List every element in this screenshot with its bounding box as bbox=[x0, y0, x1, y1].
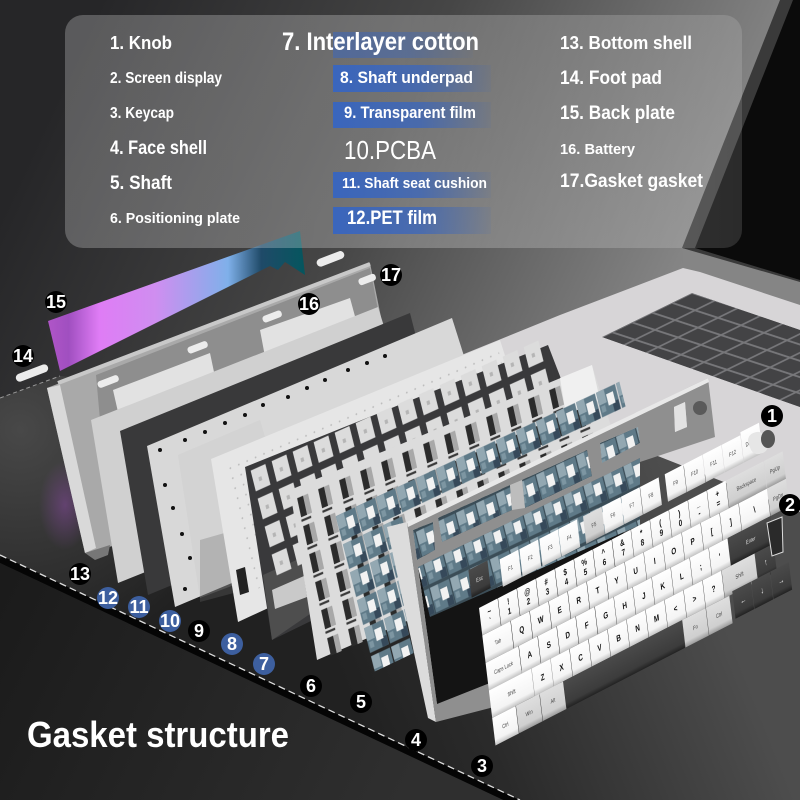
QWERTY row: PgDn bbox=[773, 492, 784, 504]
number markers: 14 bbox=[13, 346, 33, 366]
ZXCV row: Shift bbox=[735, 570, 744, 581]
ASDF row: K bbox=[660, 580, 666, 592]
esc and function row: F3 bbox=[548, 544, 553, 553]
ASDF row: Enter bbox=[746, 535, 756, 547]
ZXCV row: Shift bbox=[507, 688, 516, 699]
column 3 labels: 16. Battery bbox=[560, 142, 635, 158]
esc and function row: Esc bbox=[476, 574, 484, 585]
column 1 labels: 4. Face shell bbox=[110, 138, 207, 159]
QWERTY row: I bbox=[653, 556, 656, 567]
number markers: 9 bbox=[194, 621, 204, 641]
column 2 labels: 10.PCBA bbox=[344, 135, 437, 165]
purple reflection bbox=[39, 460, 91, 550]
column 1 labels: 2. Screen display bbox=[110, 70, 222, 87]
QWERTY row: ] bbox=[729, 516, 733, 527]
number row: & bbox=[620, 537, 625, 549]
number row: ~ bbox=[487, 605, 492, 617]
number row: $ bbox=[563, 566, 568, 578]
QWERTY row: U bbox=[633, 565, 639, 577]
esc and function row: F10 bbox=[691, 469, 699, 479]
number markers: 11 bbox=[129, 597, 149, 617]
number markers: 2 bbox=[785, 495, 795, 515]
ZXCV row bbox=[489, 544, 777, 718]
number row: * bbox=[640, 527, 644, 539]
number markers: 17 bbox=[381, 265, 401, 285]
column 2 labels: 8. Shaft underpad bbox=[340, 68, 473, 87]
switches visible through shell windows bbox=[413, 427, 640, 617]
number markers: 3 bbox=[477, 756, 487, 776]
layer 4: face shell bbox=[387, 378, 715, 722]
layer 10: PCBA bbox=[147, 318, 500, 607]
column 1 labels: 1. Knob bbox=[110, 33, 172, 53]
ZXCV row: ? bbox=[711, 583, 716, 595]
number row: 0 bbox=[678, 517, 683, 529]
number markers: 13 bbox=[70, 564, 90, 584]
esc and function row: F7 bbox=[629, 501, 635, 511]
bottom row: → bbox=[778, 574, 785, 587]
number markers: 8 bbox=[227, 634, 237, 654]
bottom row: ↓ bbox=[760, 585, 764, 596]
esc and function row: F9 bbox=[673, 479, 679, 488]
parts list panel bbox=[65, 15, 742, 248]
esc and function row: F5 bbox=[591, 521, 597, 530]
esc and function row: F8 bbox=[648, 492, 654, 501]
layer 3: keycaps bbox=[468, 411, 799, 748]
number markers: 7 bbox=[259, 654, 269, 674]
layer 16: battery bbox=[113, 298, 356, 412]
laptop keyboard bbox=[602, 293, 800, 407]
mat lower band bbox=[0, 376, 520, 800]
esc and function row: F2 bbox=[528, 554, 533, 563]
number row: 2 bbox=[526, 595, 531, 607]
number markers: 1 bbox=[767, 406, 777, 426]
layer 5: shaft switches bbox=[335, 380, 658, 672]
ASDF row: J bbox=[642, 590, 646, 602]
number row: 5 bbox=[583, 566, 588, 578]
layer 13: bottom shell bbox=[47, 263, 412, 560]
layer 11: shaft seat cushion bbox=[120, 313, 450, 595]
column 3 labels: 14. Foot pad bbox=[560, 68, 662, 89]
number row: @ bbox=[524, 585, 531, 598]
number row: 4 bbox=[564, 576, 569, 588]
number markers bbox=[12, 264, 800, 777]
ZXCV row: X bbox=[559, 661, 565, 674]
ASDF row: H bbox=[622, 600, 628, 612]
number markers: 10 bbox=[160, 611, 180, 631]
bottom row bbox=[492, 562, 792, 746]
number row: % bbox=[581, 556, 588, 569]
ASDF row: ; bbox=[699, 561, 702, 572]
esc and function row: F12 bbox=[729, 449, 737, 459]
QWERTY row: T bbox=[595, 584, 600, 596]
QWERTY row: Y bbox=[614, 574, 620, 587]
ZXCV row: ↑ bbox=[764, 556, 768, 568]
icon: knob bbox=[746, 430, 775, 456]
QWERTY row: Q bbox=[519, 623, 525, 636]
ASDF row: G bbox=[603, 609, 609, 622]
column 1 labels: 3. Keycap bbox=[110, 105, 174, 122]
QWERTY row: E bbox=[557, 604, 562, 616]
number row: - bbox=[698, 508, 701, 519]
ZXCV row: M bbox=[653, 612, 660, 625]
ZXCV row: V bbox=[597, 642, 603, 654]
QWERTY row: O bbox=[671, 545, 677, 558]
number row: ) bbox=[678, 508, 681, 519]
ASDF row: Caps Lock bbox=[494, 660, 514, 677]
number markers: 16 bbox=[299, 294, 319, 314]
number row: 1 bbox=[507, 605, 512, 617]
number row: 3 bbox=[545, 586, 550, 598]
ZXCV row: < bbox=[673, 603, 678, 615]
QWERTY row: W bbox=[537, 613, 545, 626]
foot pads bbox=[15, 250, 377, 389]
laptop base bbox=[395, 268, 800, 512]
desk mat bbox=[0, 376, 800, 800]
column 3 labels bbox=[560, 33, 704, 192]
laptop screen bbox=[682, 0, 800, 285]
number row: # bbox=[544, 576, 549, 588]
number markers: 12 bbox=[98, 588, 118, 608]
QWERTY row: \ bbox=[753, 504, 757, 515]
layer 15: back plate bbox=[48, 231, 305, 371]
number row: 8 bbox=[640, 537, 645, 549]
ASDF row: F bbox=[584, 619, 589, 631]
column 2 labels bbox=[282, 28, 487, 229]
ASDF row bbox=[486, 516, 774, 690]
column 1 labels bbox=[110, 33, 240, 227]
esc and function row: F6 bbox=[610, 511, 616, 520]
number row: + bbox=[715, 488, 720, 500]
number row: ^ bbox=[601, 547, 606, 559]
number row: = bbox=[716, 497, 721, 509]
number row: 7 bbox=[621, 546, 626, 558]
column 3 labels: 15. Back plate bbox=[560, 103, 675, 124]
ASDF row: ' bbox=[718, 551, 721, 562]
number row: ! bbox=[507, 596, 510, 607]
esc and function row bbox=[468, 420, 763, 603]
number row: _ bbox=[695, 498, 701, 510]
ZXCV row: Z bbox=[540, 671, 545, 683]
QWERTY row: R bbox=[576, 594, 582, 606]
layer 8: shaft underpad bbox=[245, 337, 600, 640]
ZXCV row: C bbox=[578, 652, 584, 664]
bottom row: Win bbox=[525, 709, 533, 719]
layer 9: transparent film bbox=[211, 340, 545, 622]
bottom row: Ctrl bbox=[502, 721, 509, 731]
number row bbox=[479, 451, 786, 636]
layer 7 and 6: interlayer cotton and positioning plate bbox=[290, 365, 640, 660]
ASDF row: A bbox=[527, 649, 533, 661]
number row: 9 bbox=[659, 527, 664, 539]
esc and function row: F11 bbox=[710, 459, 717, 469]
icon: screen display bbox=[767, 517, 783, 556]
ASDF row: D bbox=[565, 629, 571, 641]
bottom row: ← bbox=[740, 594, 747, 607]
column 3 labels: 13. Bottom shell bbox=[560, 33, 692, 53]
number row: PgUp bbox=[770, 464, 780, 476]
column 3 labels: 17.Gasket gasket bbox=[560, 171, 704, 192]
column 1 labels: 6. Positioning plate bbox=[110, 211, 240, 227]
number row: 6 bbox=[602, 556, 607, 568]
number row: Backspace bbox=[736, 477, 757, 493]
layer 12: PET film bbox=[91, 307, 425, 583]
blue highlight bars bbox=[333, 32, 491, 234]
QWERTY row: [ bbox=[710, 526, 714, 537]
column 2 labels: 9. Transparent film bbox=[344, 103, 476, 122]
bottom row: Fn bbox=[693, 623, 698, 633]
column 2 labels: 11. Shaft seat cushion bbox=[342, 176, 487, 192]
bottom row: Ctrl bbox=[716, 611, 723, 621]
QWERTY row: P bbox=[690, 535, 695, 548]
laptop hinge bbox=[682, 248, 800, 307]
number markers: 15 bbox=[46, 292, 66, 312]
number markers: 4 bbox=[411, 730, 421, 750]
ZXCV row: > bbox=[692, 593, 697, 605]
QWERTY row bbox=[482, 479, 789, 663]
number row: ` bbox=[489, 615, 492, 627]
column 2 labels: 7. Interlayer cotton bbox=[282, 28, 479, 56]
number row: ( bbox=[659, 518, 662, 529]
esc and function row: F4 bbox=[567, 534, 572, 543]
number markers: 5 bbox=[356, 692, 366, 712]
number markers: 6 bbox=[306, 676, 316, 696]
ASDF row: S bbox=[546, 639, 551, 651]
ASDF row: L bbox=[679, 570, 684, 582]
esc and function row: F1 bbox=[508, 564, 513, 573]
column 1 labels: 5. Shaft bbox=[110, 173, 173, 194]
ZXCV row: B bbox=[616, 632, 622, 644]
esc and function row: Delete bbox=[745, 437, 758, 449]
ZXCV row: N bbox=[635, 622, 641, 635]
bottom row: Alt bbox=[550, 697, 556, 706]
main opening interior bbox=[418, 458, 640, 704]
column 2 labels: 12.PET film bbox=[347, 208, 437, 229]
title: Gasket structure bbox=[27, 714, 289, 755]
QWERTY row: Tab bbox=[494, 637, 502, 647]
